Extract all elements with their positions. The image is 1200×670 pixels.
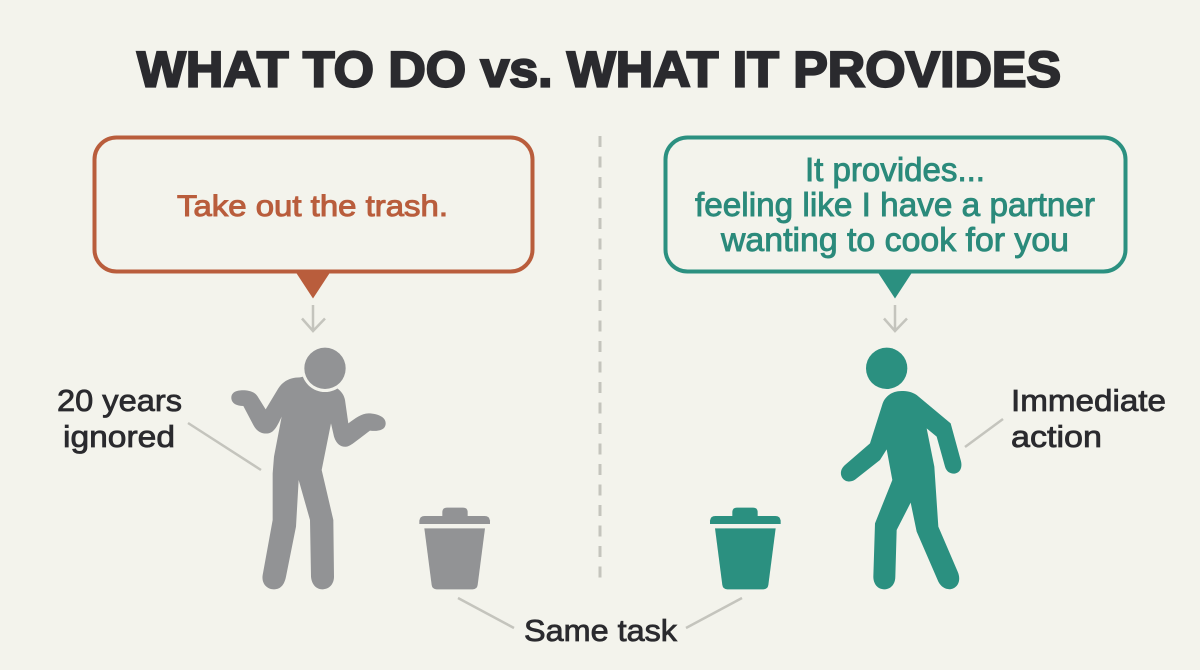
panel: what it provides speech bubble [666, 138, 1126, 298]
label: immediate action [1011, 383, 1166, 454]
bubble tail: what to do [295, 271, 331, 298]
label: 20 years ignored: ignored [63, 419, 175, 454]
arrow: bubble to gray figure [302, 305, 325, 331]
icon: gray shrugging figure [231, 345, 386, 589]
label: immediate action: Immediate [1011, 383, 1166, 418]
bubble text: it provides: wanting to cook for you [720, 221, 1069, 258]
icon: gray trash can [419, 508, 490, 589]
label: 20 years ignored: 20 years [57, 383, 182, 418]
label: immediate action: action [1011, 419, 1102, 454]
bubble text: take out the trash: Take out the trash. [177, 190, 448, 223]
panel: what to do speech bubble [94, 138, 532, 298]
icon: green walking figure [841, 348, 961, 589]
label: same task: Same task [524, 613, 678, 648]
arrow: bubble to green figure [884, 305, 907, 331]
icon: green trash can [710, 508, 781, 589]
bubble text: it provides [695, 151, 1095, 258]
bubble text: it provides: It provides... [805, 151, 985, 188]
bubble tail: what it provides [877, 271, 913, 298]
title: WHAT TO DO vs. WHAT IT PROVIDES [137, 42, 1061, 98]
bubble text: it provides: feeling like I have a partner [695, 186, 1095, 223]
label: 20 years ignored [57, 383, 182, 454]
